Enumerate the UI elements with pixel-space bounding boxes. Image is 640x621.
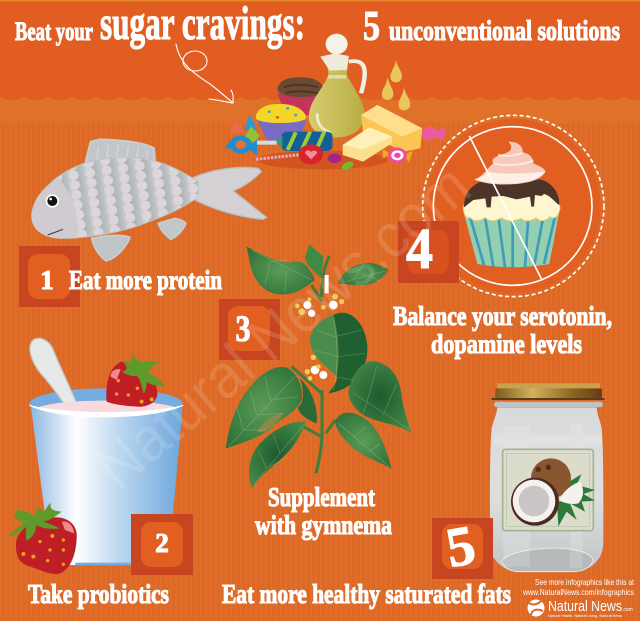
glass highlights: [494, 425, 602, 568]
jar neck: [494, 402, 603, 407]
number box 1: 1: [40, 265, 54, 295]
strawberry bottom left: [7, 503, 77, 574]
label 4: dopamine levels: [431, 329, 582, 359]
plant illustration: [226, 244, 412, 488]
shadow: [257, 151, 388, 169]
Natural News logo: Natural News: [548, 598, 622, 615]
yellow cupcake: [256, 104, 307, 141]
jar glass: [490, 407, 603, 572]
oil drops: [382, 60, 410, 110]
rim: [29, 405, 183, 417]
credit text: [522, 577, 635, 597]
striped candy: [257, 132, 333, 151]
label 4: [393, 301, 612, 359]
pectoral fin: [92, 235, 130, 261]
heart lollipop: [256, 144, 323, 164]
number box 4: 4: [406, 216, 433, 281]
strawberry on cup: [106, 354, 165, 407]
number box 3: 3: [236, 309, 250, 350]
lid: [491, 383, 605, 400]
Natural News logo: .com: [622, 607, 633, 613]
title: [15, 0, 620, 50]
coconut half: [511, 478, 559, 526]
illustration: sweets and oils: [224, 34, 446, 171]
title: Beat your: [15, 17, 93, 46]
rear fin: [158, 218, 186, 239]
number box 5: 5: [442, 514, 480, 580]
palm leaves: [557, 474, 595, 527]
number box 5: [432, 514, 493, 580]
rim back: [29, 388, 183, 420]
yogurt cup: [29, 338, 183, 565]
pink wrapped candy: [422, 126, 446, 141]
number box 1: [19, 246, 80, 307]
title: 5: [363, 4, 380, 50]
Natural News logo: [528, 598, 633, 618]
coconut piece: [559, 482, 583, 504]
spoon: [30, 338, 77, 410]
eye: [46, 194, 59, 208]
number box 2: [131, 514, 193, 575]
label: [503, 449, 593, 531]
fish head: [32, 178, 78, 238]
arrow: [176, 44, 233, 103]
label 1: Eat more protein: [69, 265, 222, 295]
number box 4: [398, 216, 459, 283]
label 2: Take probiotics: [28, 579, 169, 609]
disc outline: [433, 127, 592, 285]
number box 2: 2: [155, 528, 169, 558]
gummy candies: [228, 114, 259, 143]
butter blocks: [343, 105, 422, 162]
slash: [469, 136, 542, 279]
wrapper: [463, 208, 560, 267]
outer disc: [426, 119, 601, 293]
chocolate: [464, 179, 559, 207]
leaves: [226, 244, 412, 488]
jar base: [502, 548, 593, 572]
jelly beans: [328, 154, 355, 171]
cup body: [31, 407, 183, 565]
mouth: [48, 229, 63, 235]
dorsal fin: [85, 139, 155, 164]
wrapper stripes: [470, 217, 555, 268]
oil decanter: [309, 34, 365, 138]
crossed-out cupcake: [423, 115, 604, 297]
fish illustration: [32, 139, 267, 261]
stem: [292, 256, 335, 473]
label 3: with gymnema: [255, 510, 392, 540]
body: [32, 158, 198, 238]
watermark: Natural News.com: [83, 151, 483, 503]
leaf veins: [228, 250, 410, 483]
yogurt surface: [38, 401, 175, 416]
coconut oil jar: [490, 383, 605, 572]
label 3: [255, 482, 392, 540]
chocolate muffin: [277, 77, 323, 115]
label 3: Supplement: [268, 482, 375, 512]
dashed ring: [423, 115, 604, 297]
flowers: [295, 275, 344, 381]
Natural News logo: Natural Health, Natural Living, Natural News: [548, 614, 622, 618]
label 5: Eat more healthy saturated fats: [222, 579, 511, 609]
frosting: [474, 142, 545, 184]
blue wrapped candy: [224, 136, 257, 155]
number box 3: [219, 299, 280, 360]
coconut whole: [531, 458, 571, 498]
cream: [463, 192, 560, 221]
swirl candy: [383, 148, 413, 163]
tail: [192, 167, 267, 219]
